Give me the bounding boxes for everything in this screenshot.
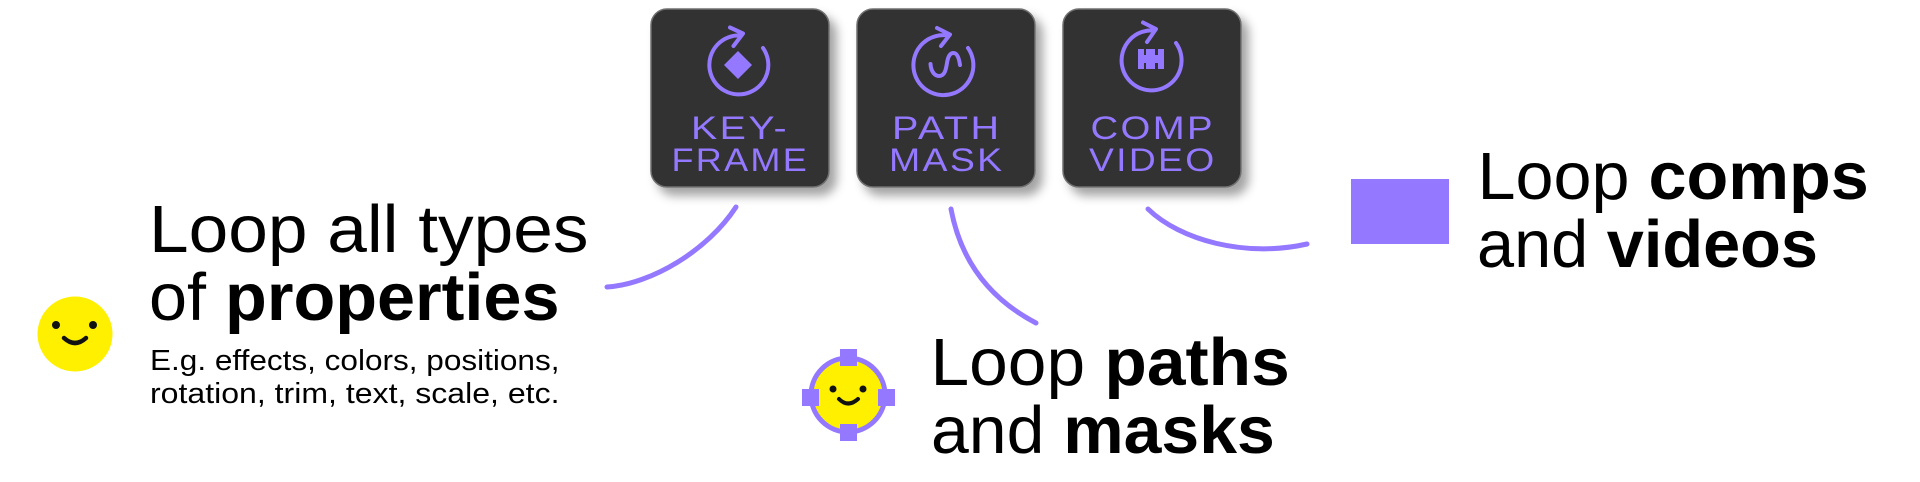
icon: loop with film strip <box>1122 22 1182 90</box>
caption: examples <box>150 345 560 410</box>
label: PATH MASK <box>889 110 1004 178</box>
label: COMP VIDEO: VIDEO <box>1089 142 1216 178</box>
button: comp video loop <box>1063 9 1241 187</box>
heading: loop paths and masks: and masks <box>931 393 1275 468</box>
connector: keyframe to properties <box>607 207 736 287</box>
label: PATH MASK: MASK <box>889 142 1004 178</box>
label: KEY-FRAME: FRAME <box>672 142 809 178</box>
caption: examples: rotation, trim, text, scale, etc. <box>150 378 560 410</box>
icon: smiley <box>38 296 112 372</box>
icon: loop with path squiggle <box>913 28 973 95</box>
label: COMP VIDEO: COMP <box>1090 110 1215 146</box>
heading: loop paths and masks: Loop paths <box>930 325 1290 400</box>
heading: loop comps and videos <box>1477 139 1869 282</box>
heading: loop comps and videos: Loop comps <box>1478 139 1869 214</box>
label: KEY-FRAME: KEY- <box>691 110 789 146</box>
label: COMP VIDEO <box>1089 110 1216 178</box>
caption: examples: E.g. effects, colors, positions, <box>150 345 560 377</box>
connector: path mask to paths <box>951 209 1036 323</box>
label: PATH MASK: PATH <box>892 110 1002 146</box>
heading: loop comps and videos: and videos <box>1477 207 1818 282</box>
icon: loop with keyframe diamond <box>709 28 768 94</box>
button: path mask loop <box>857 9 1035 187</box>
label: KEY-FRAME <box>672 110 809 178</box>
heading: properties: of properties <box>149 260 560 335</box>
heading: properties: Loop all types <box>149 192 588 267</box>
heading: loop paths and masks <box>930 325 1290 468</box>
connector: comp video to comps <box>1148 209 1307 249</box>
button: keyframe loop <box>651 9 829 187</box>
text block: loop all types of properties <box>149 192 588 410</box>
heading: properties <box>149 192 588 335</box>
icon: purple square <box>1351 179 1449 244</box>
icon: smiley with mask path handles <box>802 349 895 441</box>
